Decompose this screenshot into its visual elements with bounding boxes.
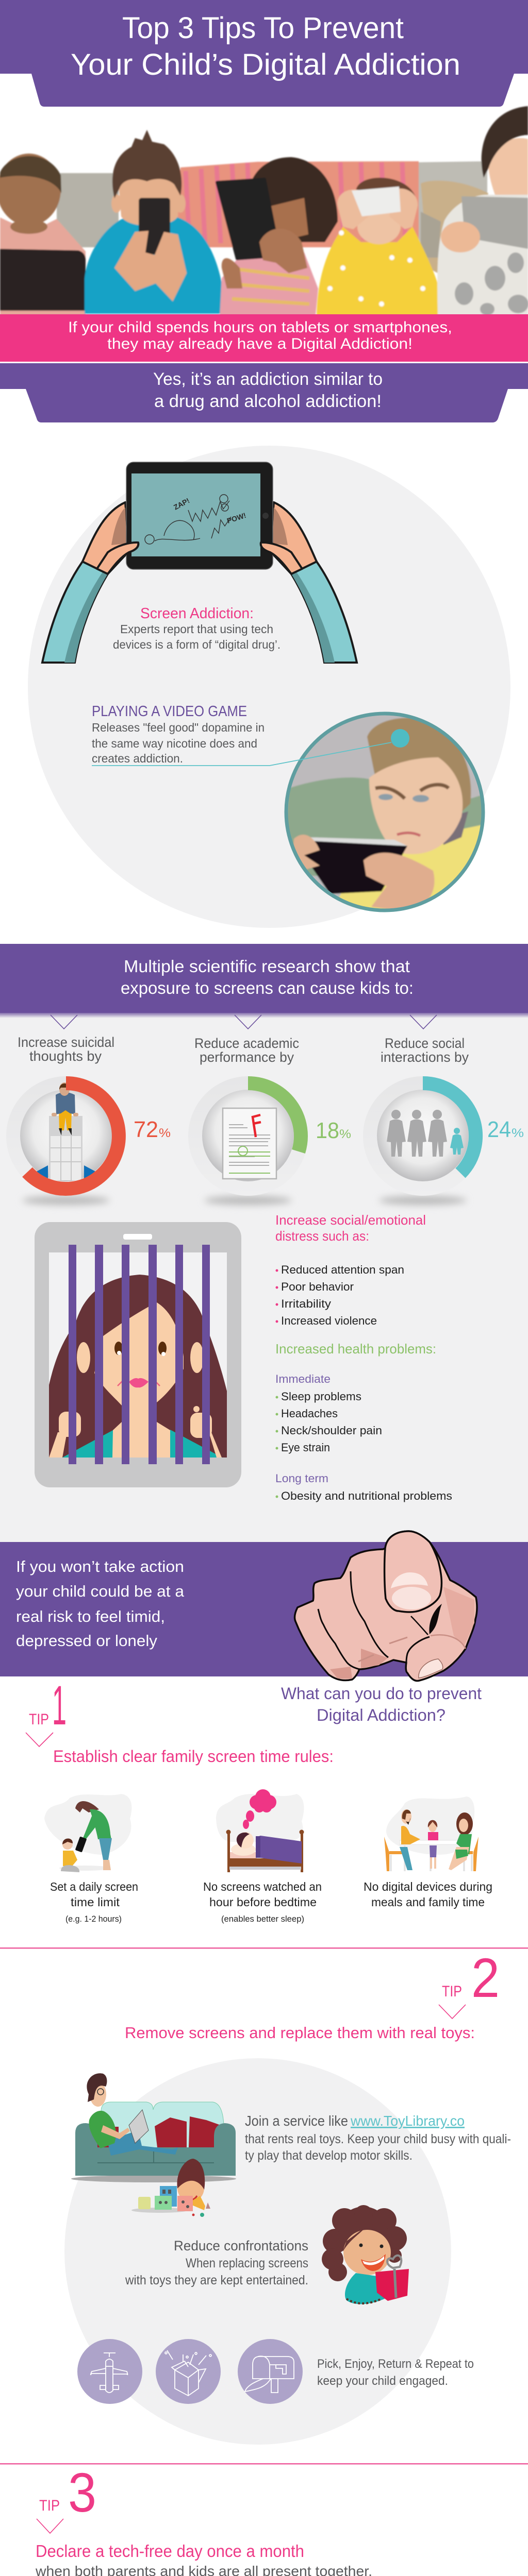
stat: academic performance 18%: % [339, 1127, 351, 1141]
text: social and emotional distress list: Poor behavior [281, 1280, 354, 1293]
icon: open box [165, 2350, 211, 2396]
tip 1 rule: no screens before bedtime: No screens watched an [203, 1880, 322, 1893]
text: social and emotional distress list [275, 1212, 426, 1327]
panel: pink digital addiction warning [0, 314, 528, 362]
stat: suicidal thoughts 72%: 72 [134, 1117, 158, 1142]
text: health problems list: Long term [275, 1472, 328, 1485]
panel: tip 2 grey circle [64, 2058, 511, 2445]
text: social and emotional distress list: Increased violence [281, 1314, 377, 1327]
photo: boy playing a game on a phone [284, 711, 490, 917]
tip 1 rule: no devices at meals [364, 1797, 492, 1909]
heading [121, 957, 414, 997]
stat: academic performance 18%: Reduce academic [194, 1036, 299, 1051]
text: join a toy library: Join a service like [245, 2113, 348, 2129]
panel: risk warning [0, 1542, 528, 1676]
text: social and emotional distress list: Increase social/emotional [275, 1212, 426, 1228]
text: health problems list [275, 1341, 452, 1502]
text: join a toy library: ty play that develop motor skills. [245, 2148, 412, 2163]
text: pick enjoy return repeat: Pick, Enjoy, Return & Repeat to [317, 2357, 474, 2371]
tip 3 text [35, 2541, 433, 2576]
text: playing a video game: PLAYING A VIDEO GAME [92, 703, 247, 720]
heading: what can you do: What can you do to prevent [281, 1684, 482, 1703]
icon: hands holding tablet: POW! [226, 511, 247, 525]
tip 3 label [37, 2461, 96, 2533]
stat: suicidal thoughts 72%: Increase suicidal [18, 1035, 114, 1050]
title [71, 11, 460, 81]
stat: social interactions 24% [363, 1036, 524, 1205]
panel: purple addiction statement: a drug and alcohol addiction! [154, 392, 382, 411]
icon: mailbox [245, 2356, 294, 2393]
tip 2 label: 2 [471, 1946, 500, 2009]
text: reduce confrontations [125, 2238, 308, 2287]
stat: academic performance 18%: performance by [200, 1049, 294, 1065]
stat: social interactions 24%: Reduce social [385, 1036, 465, 1051]
tip 2 label [439, 1946, 500, 2019]
tip 1 rule: daily screen time limit [44, 1794, 138, 1924]
tip 1 rule: daily screen time limit: time limit [71, 1895, 120, 1909]
tip 1 label: TIP [29, 1711, 49, 1728]
stat: suicidal thoughts 72%: thoughts by [29, 1048, 102, 1064]
text: social and emotional distress list: Reduced attention span [281, 1263, 404, 1276]
stat: social interactions 24%: 24 [487, 1117, 511, 1142]
panel: risk warning: your child could be at a [16, 1582, 185, 1600]
text: health problems list: Eye strain [281, 1441, 330, 1454]
tip 1 rule: no devices at meals: No digital devices during [364, 1880, 492, 1893]
panel: research findings [0, 944, 528, 1544]
text: health problems list: Headaches [281, 1407, 338, 1420]
panel: purple addiction statement [0, 363, 528, 422]
text: playing a video game [92, 703, 265, 765]
tip 1 rule: daily screen time limit: (e.g. 1-2 hours) [65, 1914, 122, 1924]
text: health problems list: Obesity and nutritional problems [281, 1489, 452, 1502]
tip 1 heading: Establish clear family screen time rules: [53, 1747, 334, 1766]
stat: social interactions 24%: interactions by [381, 1049, 469, 1065]
illustration: girl trapped behind bars in a phone [35, 1222, 241, 1487]
text: pick enjoy return repeat: keep your child engaged. [317, 2374, 448, 2388]
tip 3 label: 3 [68, 2461, 96, 2523]
text: screen addiction: Experts report that using tech [120, 622, 273, 636]
illustration: curly haired girl with a gift [322, 2205, 409, 2304]
panel: risk warning: depressed or lonely [16, 1632, 157, 1650]
tip 1 rule: no screens before bedtime: hour before bedtime [209, 1895, 317, 1909]
panel: pink digital addiction warning: they may already have a Digital Addiction! [107, 335, 412, 352]
title: Top 3 Tips To Prevent [122, 11, 404, 45]
text: social and emotional distress list: Irritability [281, 1297, 331, 1310]
text: reduce confrontations: When replacing screens [186, 2256, 308, 2270]
text: social and emotional distress list: distress such as: [275, 1228, 369, 1244]
tip 1 label [26, 1674, 67, 1747]
heading: what can you do [281, 1684, 482, 1724]
stat: academic performance 18%: 18 [316, 1118, 339, 1143]
illustration: mother reading on the sofa [71, 2073, 236, 2217]
text: reduce confrontations: with toys they are kept entertained. [125, 2273, 308, 2287]
text: join a toy library: www.ToyLibrary.co [350, 2113, 465, 2129]
icon: pointing hand [295, 1531, 477, 1681]
callout line and dot [92, 729, 409, 766]
text: health problems list: Neck/shoulder pain [281, 1424, 382, 1437]
text: health problems list: Immediate [275, 1372, 331, 1385]
photo: children on a sofa with devices [0, 106, 528, 330]
text: reduce confrontations: Reduce confrontations [174, 2238, 308, 2253]
panel: pink digital addiction warning: If your child spends hours on tablets or smartphones, [68, 319, 452, 336]
heading: Multiple scientific research show that [124, 957, 410, 976]
chevrons [51, 1015, 437, 1029]
text: screen addiction: devices is a form of “digital drug’. [113, 638, 280, 651]
text: playing a video game: creates addiction. [92, 752, 183, 765]
tip 2 heading: Remove screens and replace them with real toys: [125, 2024, 475, 2042]
heading: exposure to screens can cause kids to: [121, 978, 414, 997]
panel: title banner [0, 0, 528, 107]
panel: risk warning: If you won’t take action [16, 1557, 184, 1575]
stat: suicidal thoughts 72%: % [159, 1126, 171, 1140]
tip 3 label: TIP [39, 2497, 60, 2514]
tip 2 label: TIP [442, 1983, 462, 2000]
icon: hands holding tablet [42, 462, 357, 663]
panel: risk warning: real risk to feel timid, [16, 1607, 165, 1625]
icon: toy plane [91, 2353, 128, 2393]
heading: what can you do: Digital Addiction? [317, 1706, 446, 1724]
text: health problems list: Sleep problems [281, 1390, 361, 1403]
title: Your Child’s Digital Addiction [71, 48, 460, 81]
text: 1 [52, 1674, 67, 1736]
tip 1 rule: no devices at meals: meals and family time [371, 1895, 485, 1909]
stat: suicidal thoughts 72% [6, 1035, 171, 1205]
text: join a toy library [245, 2113, 511, 2163]
tip 3 text: Declare a tech-free day once a month [36, 2541, 304, 2561]
icons: pick, enjoy, return [77, 2339, 303, 2404]
text: health problems list: Increased health problems: [275, 1341, 436, 1357]
stat: academic performance 18% [188, 1036, 351, 1205]
tip 1 rule: no screens before bedtime: (enables better sleep) [221, 1914, 304, 1924]
text: screen addiction: Screen Addiction: [140, 605, 254, 622]
panel: grey circle screen addiction [28, 446, 510, 928]
illustration: child with toy blocks [131, 2159, 210, 2217]
text: pick enjoy return repeat [317, 2357, 474, 2388]
text: playing a video game: Releases "feel good" dopamine in [92, 721, 265, 734]
stat: social interactions 24%: % [512, 1126, 524, 1140]
text: screen addiction [113, 605, 280, 651]
icon: hands holding tablet: ZAP! [172, 496, 191, 512]
tip 1 rule: daily screen time limit: Set a daily screen [50, 1880, 138, 1893]
tip 1 rule: no screens before bedtime [203, 1789, 322, 1924]
panel: purple addiction statement: Yes, it’s an addiction similar to [153, 369, 383, 389]
text: playing a video game: the same way nicotine does and [92, 737, 257, 750]
